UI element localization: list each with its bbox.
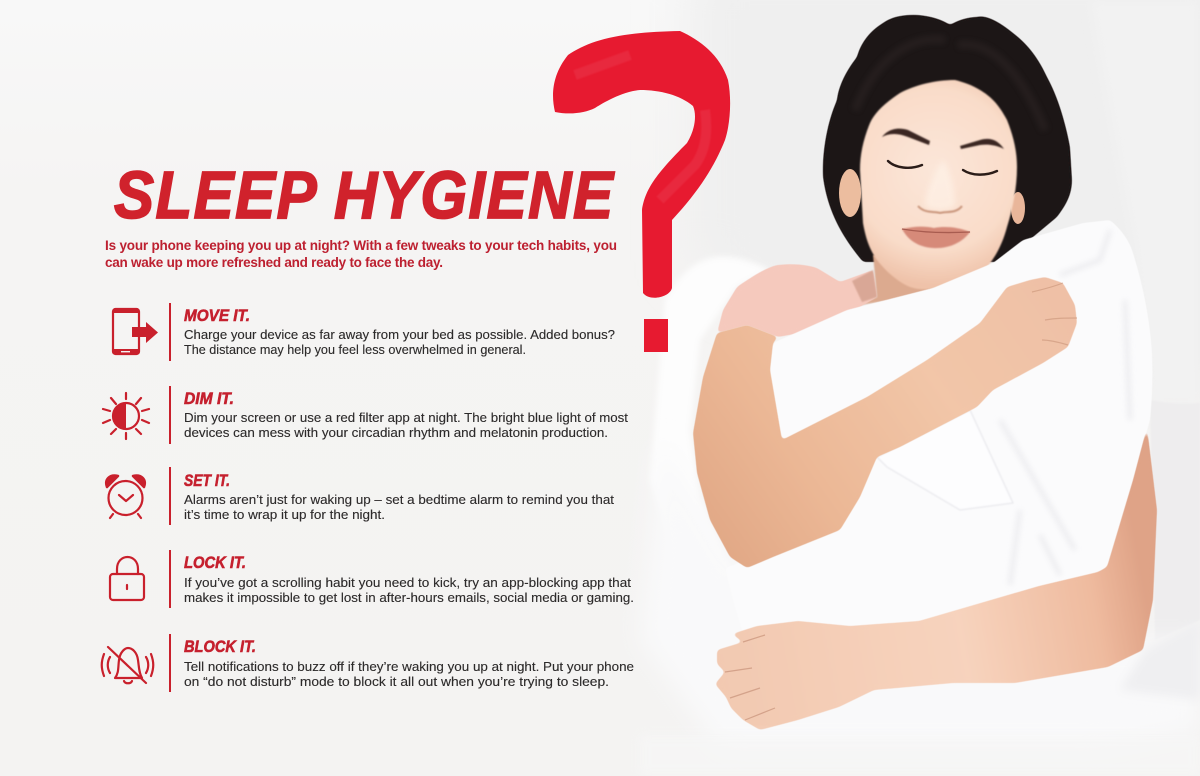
divider xyxy=(169,634,171,692)
question mark dot xyxy=(644,319,668,352)
collar shade xyxy=(852,270,877,302)
body: devices can mess with your circadian rhythm and melatonin production. xyxy=(184,425,608,440)
icon: alarm clock xyxy=(106,476,145,518)
heading: BLOCK IT. xyxy=(184,638,256,656)
duvet xyxy=(640,440,1200,750)
ear right xyxy=(1011,192,1025,224)
icon: padlock xyxy=(110,557,144,600)
right eyebrow xyxy=(960,139,1004,149)
intro text: can wake up more refreshed and ready to face the day. xyxy=(105,255,443,270)
body: makes it impossible to get lost in after-hours emails, social media or gaming. xyxy=(184,590,634,605)
body xyxy=(184,659,634,689)
intro text: Is your phone keeping you up at night? With a few tweaks to your tech habits, you xyxy=(105,238,617,253)
item: lock it xyxy=(110,550,634,608)
heading: MOVE IT. xyxy=(184,307,250,325)
lip line xyxy=(902,229,970,233)
heading: LOCK IT. xyxy=(184,554,246,572)
question mark brush highlight xyxy=(575,55,706,200)
body xyxy=(184,492,614,522)
body: Charge your device as far away from your bed as possible. Added bonus? xyxy=(184,327,615,342)
body: If you’ve got a scrolling habit you need to kick, try an app-blocking app that xyxy=(184,575,631,590)
item: block it xyxy=(102,634,634,692)
right eye xyxy=(963,170,997,175)
body xyxy=(184,410,628,440)
body: Dim your screen or use a red filter app at night. The bright blue light of most xyxy=(184,410,628,425)
divider xyxy=(169,550,171,608)
icon: half sun xyxy=(103,393,149,439)
mouth xyxy=(902,227,970,248)
left eyebrow xyxy=(882,129,930,145)
question mark xyxy=(553,31,730,352)
title: SLEEP HYGIENE xyxy=(114,158,615,233)
divider xyxy=(169,467,171,525)
upper arm, forearm and hand xyxy=(693,277,1077,568)
finger creases xyxy=(1032,283,1077,345)
body: Tell notifications to buzz off if they’re waking you up at night. Put your phone xyxy=(184,659,634,674)
pillow flap xyxy=(877,410,1013,510)
heading: DIM IT. xyxy=(184,390,234,408)
hair highlights xyxy=(855,39,1045,130)
body: The distance may help you feel less overwhelmed in general. xyxy=(184,342,526,357)
item: dim it xyxy=(103,386,628,444)
body: on “do not disturb” mode to block it all out when you’re trying to sleep. xyxy=(184,674,609,689)
bed pillow behind head xyxy=(650,0,1200,640)
pillow fold shading xyxy=(1000,230,1130,585)
ear left xyxy=(839,169,861,217)
divider xyxy=(169,303,171,361)
nose base xyxy=(918,206,962,213)
divider xyxy=(169,386,171,444)
face features xyxy=(882,129,1004,248)
icon: phone with arrow xyxy=(113,309,158,354)
body: it’s time to wrap it up for the night. xyxy=(184,507,385,522)
neck xyxy=(860,255,990,305)
lower arm and hand xyxy=(715,427,1157,730)
item: move it xyxy=(113,303,615,361)
body xyxy=(184,575,634,605)
icon: muted bell xyxy=(102,647,153,683)
hair xyxy=(823,15,1072,262)
hugged pillow and white sheet xyxy=(725,220,1152,640)
photo: woman sleeping hugging a pillow xyxy=(640,0,1200,776)
intro text xyxy=(105,238,617,270)
body: Alarms aren’t just for waking up – set a bedtime alarm to remind you that xyxy=(184,492,614,507)
left eye xyxy=(888,161,922,168)
item: set it xyxy=(106,467,614,525)
body xyxy=(184,327,615,357)
face xyxy=(860,80,1017,289)
shirt xyxy=(717,264,877,337)
bottom fade xyxy=(640,735,1200,776)
heading: SET IT. xyxy=(184,472,230,490)
nose xyxy=(925,160,955,210)
finger lines xyxy=(725,635,775,720)
